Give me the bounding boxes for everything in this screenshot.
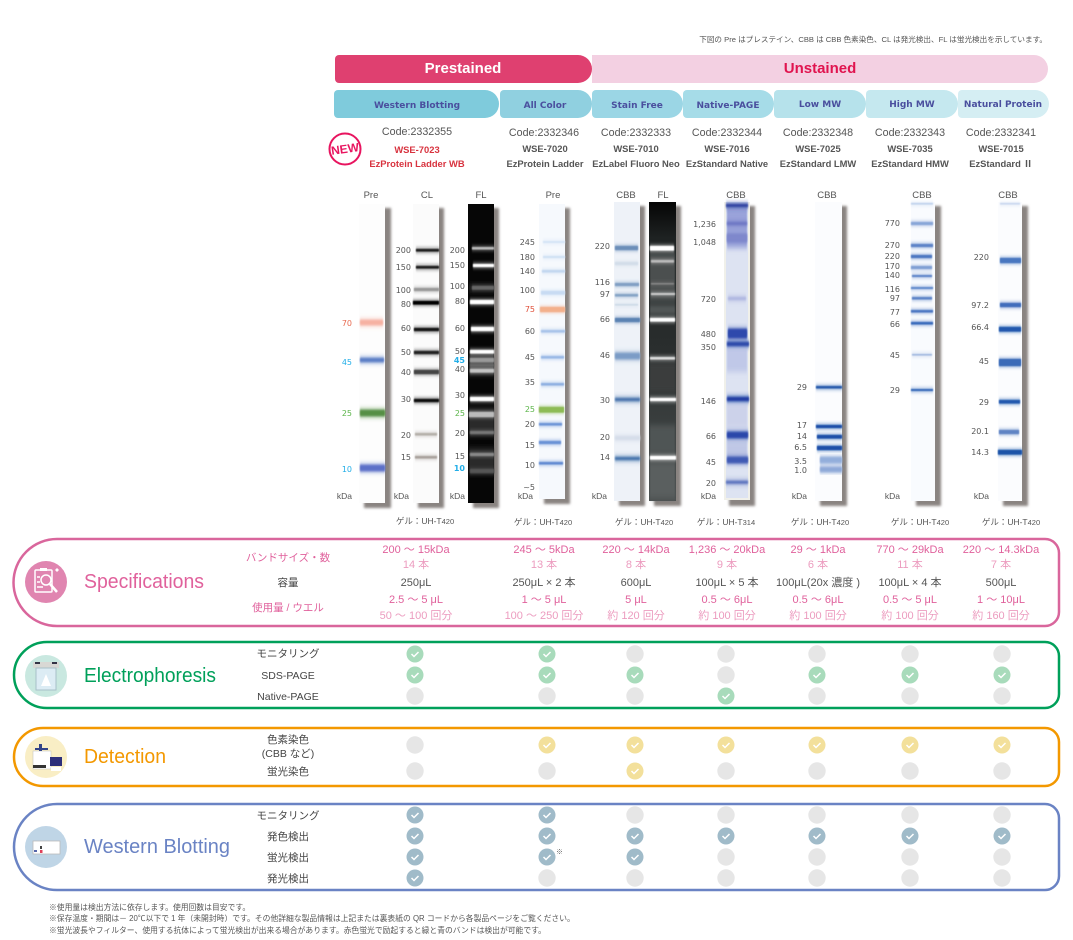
tab: Natural Protein: Natural Protein <box>964 100 1042 110</box>
column: WSE-7025 specs: 約 100 回分 <box>789 608 847 622</box>
tab: All Color <box>500 90 592 118</box>
panel: Western Blotting <box>14 804 1059 890</box>
gel lane: 7035 HMW CBB: 45 <box>890 351 900 360</box>
gel lane: 7020 Pre: 15 <box>525 441 535 450</box>
gel lane: 7016 Native CBB: 45 <box>706 458 716 467</box>
product: WSE-7015 <box>966 127 1036 169</box>
product: WSE-7010 <box>592 127 680 169</box>
product: WSE-7035 <box>871 127 949 169</box>
column: WSE-7020 specs: 1 ～ 5 μL <box>522 594 566 606</box>
gel lane: 7023 Pre: 10 <box>342 465 352 474</box>
gel lane: 7025 LMW CBB: CBB <box>817 190 837 201</box>
gel lane: 7025 LMW CBB: 3.5 <box>794 457 807 466</box>
gel lane: 7023 Pre: 45 <box>342 358 352 367</box>
column: WSE-7010 specs: 5 μL <box>625 594 647 606</box>
gel lane: 7016 Native CBB: CBB <box>726 190 746 201</box>
gel lane: 7015 CBB: kDa <box>974 491 989 501</box>
product: WSE-7025: Code:2332348 <box>783 127 853 139</box>
product: WSE-7010: Code:2332333 <box>601 127 671 139</box>
column: WSE-7035 specs: 約 100 回分 <box>881 608 939 622</box>
product: WSE-7016: EzStandard Native <box>686 158 768 169</box>
column: WSE-7023 specs: 14 本 <box>403 557 429 571</box>
row labels: 使用量 / ウエル <box>252 601 324 614</box>
row labels: 発光検出 <box>267 872 309 885</box>
check row: monitoring <box>406 806 1011 824</box>
gel lane: 7020 Pre: 180 <box>520 253 535 262</box>
column: WSE-7015 specs <box>963 544 1040 622</box>
gel caption: ゲル：UH-T420 <box>891 517 949 527</box>
gel caption: ゲル：UH-T314 <box>697 517 755 527</box>
column: WSE-7020 specs: 245 ～ 5kDa <box>513 544 575 556</box>
row labels: (CBB など) <box>262 748 314 760</box>
product: WSE-7023: WSE-7023 <box>394 144 440 155</box>
product: WSE-7035: EzStandard HMW <box>871 158 949 169</box>
column: WSE-7023 specs: 2.5 ～ 5 μL <box>389 594 443 606</box>
product: WSE-7025: EzStandard LMW <box>780 158 856 169</box>
gel lane: 7023 FL: 50 <box>455 347 465 356</box>
gel lane: 7020 Pre: Pre <box>546 190 560 201</box>
gel lane: 7010 CBB: 30 <box>600 396 610 405</box>
product: WSE-7035: WSE-7035 <box>887 143 933 154</box>
product: WSE-7020 <box>506 127 584 169</box>
gel lane: 7035 HMW CBB: 66 <box>890 320 900 329</box>
check row: dye staining <box>406 736 1010 754</box>
gel caption: ゲル：UH-T420 <box>396 516 454 526</box>
gel lane: 7010 CBB: CBB <box>616 190 636 201</box>
column: WSE-7023 specs <box>380 544 452 622</box>
gel lane: 7025 LMW CBB <box>792 190 847 506</box>
column: WSE-7016 specs <box>689 544 766 622</box>
column: WSE-7035 specs: 0.5 ～ 5 μL <box>883 594 937 606</box>
gel lane: 7015 CBB: 20.1 <box>971 427 989 436</box>
gel caption: ゲル：UH-T420 <box>791 517 849 527</box>
product: WSE-7016 <box>686 127 768 169</box>
column: WSE-7025 specs: 29 ～ 1kDa <box>790 544 846 556</box>
gel lane: 7035 HMW CBB: 170 <box>885 262 900 271</box>
row labels: 色素染色 <box>267 733 309 746</box>
icon: clipboard with magnifier <box>25 561 67 603</box>
column: WSE-7020 specs: 250μL × 2 本 <box>512 575 576 589</box>
column: WSE-7023 specs: 250μL <box>401 577 431 589</box>
column: WSE-7025 specs: 0.5 ～ 6μL <box>793 594 843 606</box>
column: WSE-7016 specs: 約 100 回分 <box>698 608 756 622</box>
gel lane: 7023 FL: 100 <box>450 282 465 291</box>
gel lane: 7016 Native CBB: 480 <box>701 330 716 339</box>
gel lane: 7025 LMW CBB: kDa <box>792 491 807 501</box>
gel lane: 7023 CL: CL <box>421 190 433 201</box>
top legend note: 下図の Pre はプレステイン、CBB は CBB 色素染色、CL は発光検出、FL は蛍光検出を示しています。 <box>699 34 1047 44</box>
heading: Specifications <box>84 571 204 593</box>
category bar: Prestained <box>335 55 592 83</box>
gel lane: 7023 FL: 200 <box>450 246 465 255</box>
gel lane: 7016 Native CBB: kDa <box>701 491 716 501</box>
tab: Western Blotting: Western Blotting <box>374 101 460 111</box>
gel lane: 7020 Pre: 60 <box>525 327 535 336</box>
product: WSE-7016: Code:2332344 <box>692 127 762 139</box>
gel lane: 7035 HMW CBB: CBB <box>912 190 932 201</box>
heading: Detection <box>84 746 166 768</box>
gel caption: ゲル：UH-T420 <box>615 517 673 527</box>
product: WSE-7016: WSE-7016 <box>704 143 750 154</box>
gel lane: 7023 FL: 10 <box>454 464 465 473</box>
icon: NEW badge <box>330 134 361 164</box>
gel lane: 7035 HMW CBB: 116 <box>885 285 900 294</box>
check row: Native-PAGE <box>406 687 1011 705</box>
column: WSE-7015 specs: 7 本 <box>991 557 1011 571</box>
gel lane: 7035 HMW CBB: 77 <box>890 308 900 317</box>
column: WSE-7025 specs <box>776 544 860 622</box>
footnotes: ※使用量は検出方法に依存します。使用回数は目安です。 <box>49 902 250 912</box>
gel lane: 7023 FL: 80 <box>455 297 465 306</box>
column: WSE-7015 specs: 220 ～ 14.3kDa <box>963 544 1040 556</box>
product: WSE-7023 <box>369 126 465 169</box>
column: WSE-7015 specs: 約 160 回分 <box>972 608 1030 622</box>
gel lane: 7020 Pre <box>518 190 570 504</box>
gel lane: 7023 FL: 15 <box>455 452 465 461</box>
column: WSE-7023 specs: 200 ～ 15kDa <box>382 544 451 556</box>
icon: electrophoresis tank <box>25 655 67 697</box>
tab: Low MW: Low MW <box>799 100 841 110</box>
panel: Specifications <box>13 539 1059 626</box>
gel lane: 7035 HMW CBB: 270 <box>885 241 900 250</box>
gel lane: 7023 CL: 30 <box>401 395 411 404</box>
gel lane: 7035 HMW CBB: kDa <box>885 491 900 501</box>
gel lane: 7020 Pre: 140 <box>520 267 535 276</box>
gel lane: 7023 CL: 100 <box>396 286 411 295</box>
column: WSE-7020 specs: 100 ～ 250 回分 <box>505 609 583 622</box>
row labels: 発色検出 <box>267 830 309 843</box>
gel lane: 7020 Pre: 25 <box>525 405 535 414</box>
category bar: Unstained <box>592 55 1048 83</box>
gel lane: 7023 CL: 20 <box>401 431 411 440</box>
column: WSE-7035 specs: 770 ～ 29kDa <box>876 544 945 556</box>
gel lane: 7023 Pre: 70 <box>342 319 352 328</box>
gel lane: 7016 Native CBB: 1,236 <box>693 220 716 229</box>
gel lane: 7023 CL: 15 <box>401 453 411 462</box>
gel lane: 7020 Pre: 45 <box>525 353 535 362</box>
category bar: Prestained: Prestained <box>425 60 501 77</box>
product: WSE-7025: WSE-7025 <box>795 143 841 154</box>
gel lane: 7016 Native CBB <box>693 190 755 506</box>
row labels: モニタリング <box>256 647 320 660</box>
gel lane: 7020 Pre: 100 <box>520 286 535 295</box>
row labels <box>262 733 314 778</box>
icon: imager and monitor <box>25 736 67 778</box>
panel: Electrophoresis <box>14 642 1059 708</box>
gel lane: 7023 FL: FL <box>475 190 487 201</box>
row labels: SDS-PAGE <box>261 670 315 682</box>
check row: luminescence <box>406 869 1011 887</box>
gel lane: 7010 FL <box>649 190 681 506</box>
row labels: 容量 <box>278 576 299 589</box>
gel lane: 7015 CBB: CBB <box>998 190 1018 201</box>
gel lane: 7020 Pre: 20 <box>525 420 535 429</box>
column: WSE-7035 specs: 100μL × 4 本 <box>878 575 942 589</box>
gel lane: 7016 Native CBB: 720 <box>701 295 716 304</box>
product: WSE-7020: WSE-7020 <box>522 143 568 154</box>
gel lane: 7020 Pre: 245 <box>520 238 535 247</box>
footnotes: ※蛍光波長やフィルター、使用する抗体によって蛍光検出が出来る場合があります。赤色蛍光で励起すると緑と青のバンドは検出が可能です。 <box>49 925 546 935</box>
tab: Western Blotting <box>334 90 499 118</box>
gel lane: 7023 Pre <box>337 190 391 508</box>
column: WSE-7015 specs: 500μL <box>986 577 1016 589</box>
product: WSE-7035: Code:2332343 <box>875 127 945 139</box>
product: WSE-7010: WSE-7010 <box>613 143 659 154</box>
row labels: 蛍光検出 <box>267 851 309 864</box>
heading: Western Blotting <box>84 836 230 858</box>
gel lane: 7015 CBB: 97.2 <box>971 301 989 310</box>
gel lane: 7023 Pre: 25 <box>342 409 352 418</box>
row labels <box>256 647 320 703</box>
check row: fluorescence: ※ <box>556 848 563 856</box>
icon: blotting device <box>25 826 67 868</box>
row labels <box>256 809 320 885</box>
gel lane: 7023 Pre: kDa <box>337 491 352 501</box>
gel lane: 7020 Pre: kDa <box>518 491 533 501</box>
column: WSE-7016 specs: 9 本 <box>717 557 737 571</box>
gel lane: 7020 Pre: ~5 <box>523 483 535 492</box>
gel lane: 7015 CBB: 45 <box>979 357 989 366</box>
gel lane: 7023 FL: 45 <box>454 356 465 365</box>
check row: monitoring <box>406 645 1011 663</box>
column: WSE-7010 specs: 220 ～ 14kDa <box>602 544 671 556</box>
gel lane: 7023 CL: 150 <box>396 263 411 272</box>
gel lane: 7016 Native CBB: 350 <box>701 343 716 352</box>
row labels: バンドサイズ・数 <box>246 551 331 564</box>
tab: Stain Free <box>592 90 683 118</box>
gel caption: ゲル：UH-T420 <box>982 517 1040 527</box>
row labels: Native-PAGE <box>257 691 319 703</box>
gel lane: 7023 CL: kDa <box>394 491 409 501</box>
column: WSE-7010 specs: 600μL <box>621 577 651 589</box>
gel lane: 7010 CBB: 116 <box>595 278 610 287</box>
gel lane: 7023 FL: kDa <box>450 491 465 501</box>
gel lane: 7016 Native CBB: 20 <box>706 479 716 488</box>
gel lane: 7010 FL: FL <box>657 190 669 201</box>
gel lane: 7023 FL: 40 <box>455 365 465 374</box>
tab: High MW: High MW <box>889 100 935 110</box>
gel lane: 7010 CBB: 20 <box>600 433 610 442</box>
column: WSE-7016 specs: 0.5 ～ 6μL <box>702 594 752 606</box>
column: WSE-7025 specs: 100μL(20x 濃度 ) <box>776 575 860 589</box>
gel caption: ゲル：UH-T420 <box>514 517 572 527</box>
gel lane: 7023 CL: 50 <box>401 348 411 357</box>
column: WSE-7015 specs: 1 ～ 10μL <box>977 594 1025 606</box>
tab: Natural Protein <box>958 90 1049 118</box>
tab: Native-PAGE: Native-PAGE <box>697 101 759 111</box>
gel lane: 7010 CBB: 97 <box>600 290 610 299</box>
product: WSE-7015: WSE-7015 <box>978 143 1024 154</box>
gel lane: 7010 CBB: kDa <box>592 491 607 501</box>
gel lane: 7015 CBB: 220 <box>974 253 989 262</box>
column: WSE-7016 specs: 1,236 ～ 20kDa <box>689 544 766 556</box>
gel lane: 7025 LMW CBB: 1.0 <box>794 466 807 475</box>
gel lane: 7023 FL: 30 <box>455 391 465 400</box>
gel lane: 7023 Pre: Pre <box>364 190 378 201</box>
gel lane: 7025 LMW CBB: 17 <box>797 421 807 430</box>
gel lane: 7023 FL: 150 <box>450 261 465 270</box>
gel lane: 7023 CL: 40 <box>401 368 411 377</box>
footnotes: ※保存温度・期間は－ 20℃以下で 1 年（未開封時）です。その他詳細な製品情報は上記または裏表紙の QR コードから各製品ページをご覧ください。 <box>49 913 575 923</box>
tab: High MW <box>866 90 958 118</box>
check row: SDS-PAGE <box>406 666 1010 684</box>
column: WSE-7035 specs: 11 本 <box>897 557 923 571</box>
tab: Native-PAGE <box>683 90 774 118</box>
tab: Stain Free: Stain Free <box>611 101 663 111</box>
gel lane: 7023 CL: 200 <box>396 246 411 255</box>
application tabs <box>334 90 1049 118</box>
product: WSE-7015: EzStandard Ⅱ <box>969 158 1033 169</box>
column: WSE-7023 specs: 50 ～ 100 回分 <box>380 609 452 622</box>
gel lane: 7010 CBB <box>592 190 645 506</box>
gel lane: 7010 CBB: 66 <box>600 315 610 324</box>
tab: Low MW <box>774 90 866 118</box>
gel lane: 7023 FL: 25 <box>455 409 465 418</box>
check row: colorimetric <box>406 828 1010 844</box>
column: WSE-7020 specs <box>505 544 583 622</box>
gel lane: 7016 Native CBB: 1,048 <box>693 238 716 247</box>
product: WSE-7020: EzProtein Ladder <box>506 158 584 169</box>
gel lane: 7025 LMW CBB: 29 <box>797 383 807 392</box>
column: WSE-7016 specs: 100μL × 5 本 <box>695 575 759 589</box>
gel lane: 7020 Pre: 10 <box>525 461 535 470</box>
heading: Electrophoresis <box>84 665 216 687</box>
column: WSE-7010 specs <box>602 544 671 622</box>
gel lane: 7035 HMW CBB: 140 <box>885 271 900 280</box>
category bar: Unstained: Unstained <box>784 60 856 77</box>
gel lane: 7015 CBB: 29 <box>979 398 989 407</box>
check row: fluorescence <box>406 848 1011 866</box>
column: WSE-7010 specs: 約 120 回分 <box>607 608 665 622</box>
footnotes <box>49 902 575 935</box>
row labels: モニタリング <box>256 809 320 822</box>
column: WSE-7020 specs: 13 本 <box>531 557 557 571</box>
gel lane: 7035 HMW CBB: 220 <box>885 252 900 261</box>
column: WSE-7025 specs: 6 本 <box>808 557 828 571</box>
product names <box>369 126 1036 169</box>
product: WSE-7025 <box>780 127 856 169</box>
gel lane: 7035 HMW CBB: 770 <box>885 219 900 228</box>
panel: Detection <box>14 728 1059 786</box>
gel lane: 7035 HMW CBB: 29 <box>890 386 900 395</box>
gel lane: 7016 Native CBB: 146 <box>701 397 716 406</box>
row labels: 蛍光染色 <box>267 765 309 778</box>
icon: NEW badge: NEW <box>330 140 361 158</box>
gel lane: 7023 FL: 20 <box>455 429 465 438</box>
gel lane: 7023 FL <box>450 190 499 508</box>
gel lane: 7015 CBB: 14.3 <box>971 448 989 457</box>
product: WSE-7015: Code:2332341 <box>966 127 1036 139</box>
row labels <box>246 551 331 614</box>
tab: All Color: All Color <box>524 101 567 111</box>
gel lane: 7023 FL: 60 <box>455 324 465 333</box>
gel lane: 7025 LMW CBB: 6.5 <box>794 443 807 452</box>
gel lane: 7010 CBB: 14 <box>600 453 610 462</box>
gel lane: 7023 CL <box>394 190 444 508</box>
check row: fluorescent staining <box>406 762 1011 780</box>
column: WSE-7035 specs <box>876 544 945 622</box>
gel lane: 7035 HMW CBB <box>885 190 941 506</box>
gel lane: 7020 Pre: 75 <box>525 305 535 314</box>
gel lane: 7020 Pre: 35 <box>525 378 535 387</box>
gel lane: 7010 CBB: 220 <box>595 242 610 251</box>
product: WSE-7020: Code:2332346 <box>509 127 579 139</box>
product: WSE-7023: Code:2332355 <box>382 126 452 138</box>
gel lane: 7015 CBB <box>971 190 1028 506</box>
product: WSE-7010: EzLabel Fluoro Neo <box>592 158 680 169</box>
gel lane: 7015 CBB: 66.4 <box>971 323 989 332</box>
gel lane: 7025 LMW CBB: 14 <box>797 432 807 441</box>
gel lane: 7023 CL: 60 <box>401 324 411 333</box>
gel lane: 7016 Native CBB: 66 <box>706 432 716 441</box>
gel lane: 7023 CL: 80 <box>401 300 411 309</box>
column: WSE-7010 specs: 8 本 <box>626 557 646 571</box>
gel lane: 7010 CBB: 46 <box>600 351 610 360</box>
gel lane: 7035 HMW CBB: 97 <box>890 294 900 303</box>
product: WSE-7023: EzProtein Ladder WB <box>369 158 465 169</box>
